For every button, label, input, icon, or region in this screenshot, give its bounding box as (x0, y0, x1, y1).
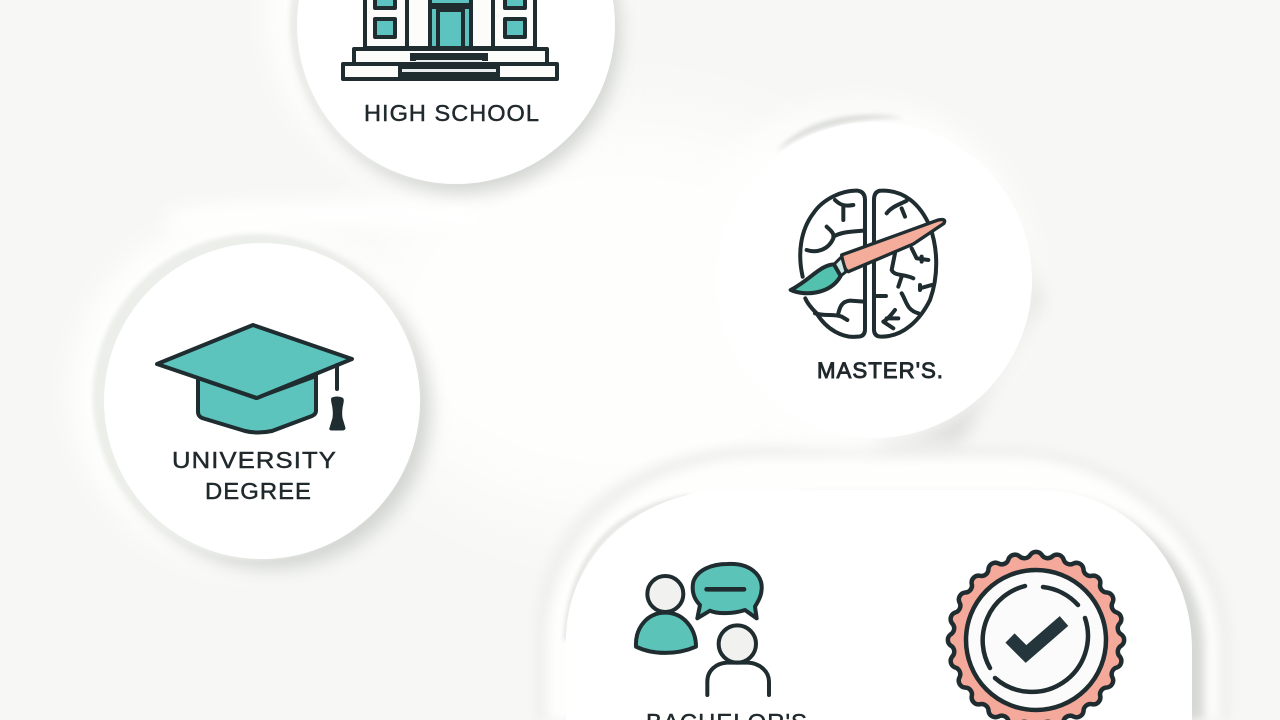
icon: brain with paintbrush (791, 191, 945, 337)
label: high school: HIGH SCHOOL (364, 100, 540, 126)
icon: graduation cap (157, 325, 352, 432)
label: university: UNIVERSITY (172, 447, 337, 473)
panel: university degree circle (70, 214, 430, 570)
panel: master's circle (688, 103, 1040, 447)
label: degree: DEGREE (205, 478, 312, 504)
icon: certification badge (942, 546, 1130, 720)
label: master's: MASTER'S. (817, 358, 944, 383)
panel: bachelor's rounded card (534, 446, 1232, 720)
icon: people talking (636, 564, 769, 695)
panel: high school circle (267, 0, 623, 193)
icon: school building (343, 0, 557, 79)
